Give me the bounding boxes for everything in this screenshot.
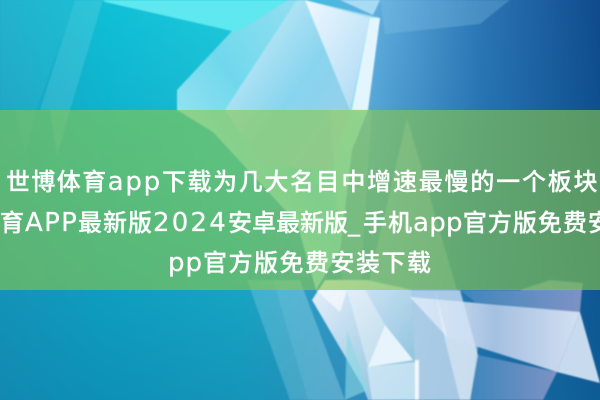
- green banner: [0, 110, 600, 290]
- headline line 2: 育APP最新版2024安卓最新版_手机app官方版免费安: [0, 208, 600, 238]
- headline line 1: 世博体育app下载为几大名目中增速最慢的一个板块: [6, 167, 599, 197]
- headline line 3: pp官方版免费安装下载: [168, 248, 433, 278]
